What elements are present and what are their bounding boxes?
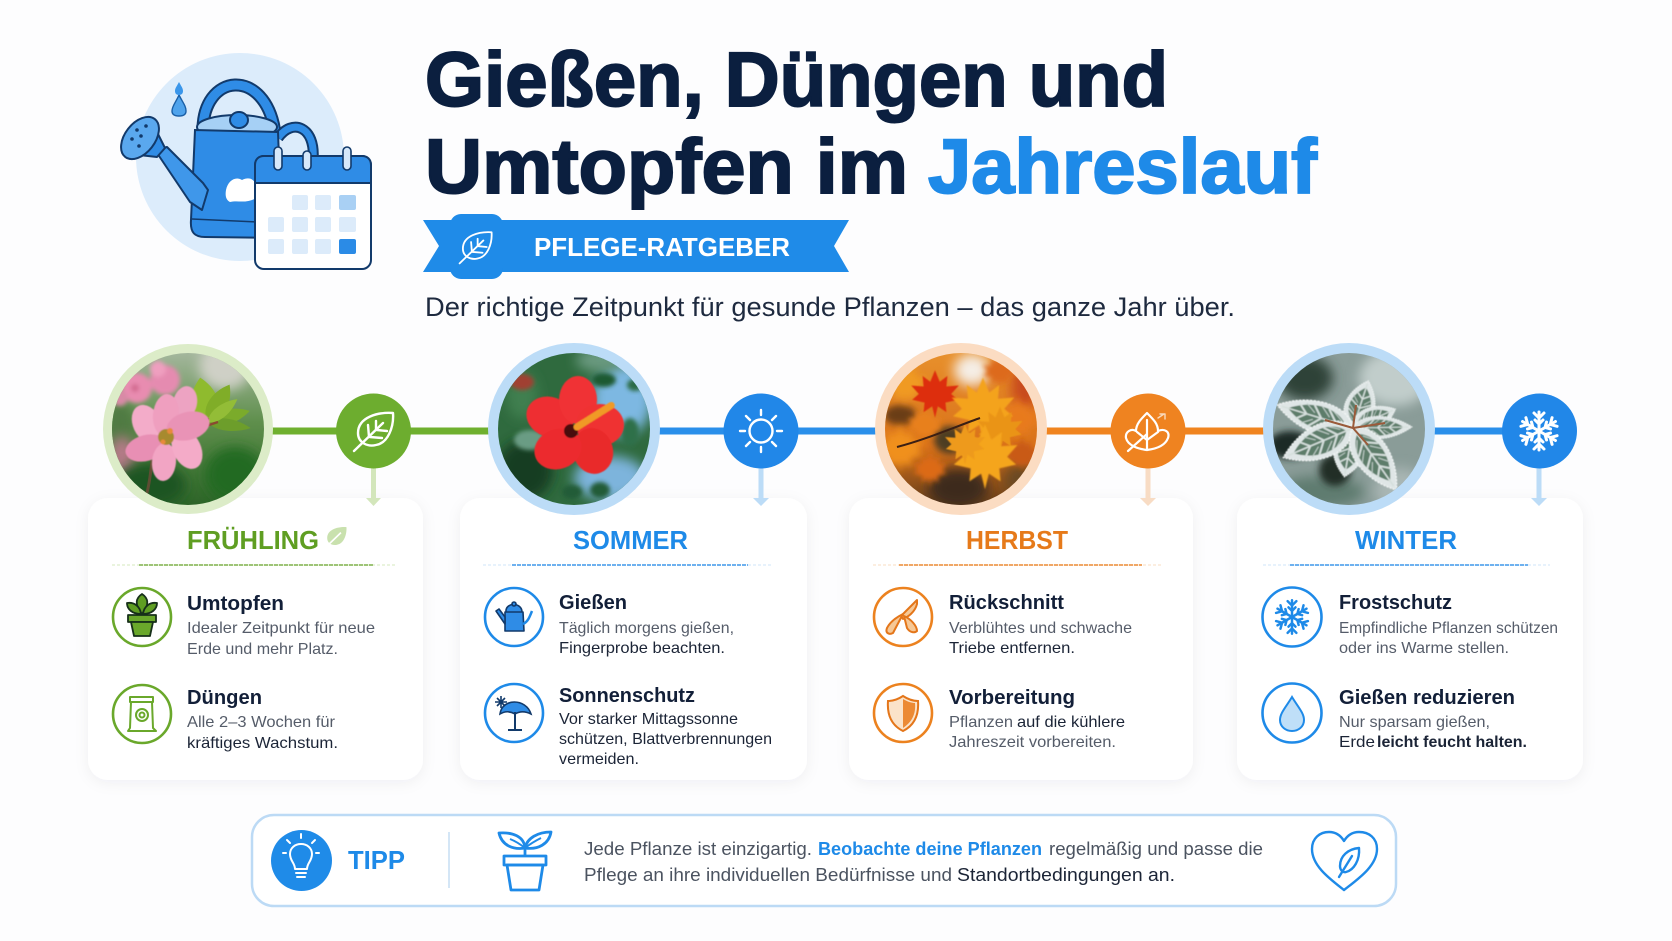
panel: Herbst card: Vorbereitung [949, 686, 1075, 709]
panel: Winter card: Nur sparsam gießen, [1339, 714, 1490, 731]
tip text: Jede Pflanze ist einzigartig. [584, 839, 812, 859]
illustration: watering can and calendar [113, 53, 371, 269]
tip text: Pflege an ihre individuellen Bedürfnisse und [584, 865, 952, 885]
panel: Herbst card [849, 498, 1193, 780]
photo: frosted winter leaves [1263, 343, 1435, 515]
icon: ribbon leaf [460, 232, 492, 263]
icon: autumn leaf badge [1110, 394, 1186, 468]
icon: plant pot [499, 832, 551, 890]
item: Gießen [485, 588, 543, 646]
panel: Winter card: oder ins Warme stellen. [1339, 640, 1509, 657]
panel: Winter card [1237, 498, 1583, 780]
tip text: regelmäßig und passe die [1049, 839, 1263, 859]
title: Jahreslauf [928, 124, 1317, 210]
ribbon: Pflege-Ratgeber [423, 214, 849, 279]
photo: summer hibiscus [488, 343, 660, 515]
panel: Herbst card: Verblühtes und schwache [949, 620, 1132, 637]
panel: Frühling card [88, 498, 423, 780]
arrow: Sommer connector [753, 466, 769, 506]
panel: Sommer card: Sonnenschutz [559, 684, 695, 707]
panel: Sommer card: Vor starker Mittagssonne [559, 711, 738, 728]
panel: Frühling card: Idealer Zeitpunkt für neue [187, 620, 375, 637]
icon: spring leaf badge [336, 394, 411, 468]
panel: Sommer card: vermeiden. [559, 751, 639, 768]
tip text [584, 839, 1263, 885]
panel: Frühling card: kräftiges Wachstum. [187, 735, 338, 752]
panel: Frühling card: Düngen [187, 686, 262, 709]
icon: heart with leaf [1312, 832, 1377, 890]
panel: Frühling card: Umtopfen [187, 592, 284, 615]
panel: Sommer card: schützen, Blattverbrennungen [559, 731, 772, 748]
panel: Sommer card [460, 498, 807, 780]
photo: spring blossom [103, 342, 273, 514]
icon: light bulb [271, 830, 332, 891]
panel: Sommer card: Täglich morgens gießen, [559, 620, 734, 637]
title: Umtopfen im [425, 124, 908, 210]
item: Düngen [113, 685, 171, 743]
arrow: Frühling connector [366, 466, 381, 506]
panel: Winter card: Erde [1339, 734, 1375, 751]
item: Gießen reduzieren [1262, 684, 1322, 742]
heading: Frühling: FRÜHLING [187, 525, 319, 555]
item: Vorbereitung [874, 684, 932, 742]
icon: heading leaf [325, 527, 347, 548]
photo: autumn leaves [875, 343, 1047, 515]
panel: Winter card: Gießen reduzieren [1339, 686, 1515, 709]
heading: Herbst: HERBST [966, 525, 1068, 555]
panel: Herbst card: auf die kühlere [1017, 714, 1125, 731]
label: Tipp: TIPP [348, 845, 405, 875]
icon: winter snowflake badge [1502, 394, 1577, 468]
arrow: Herbst connector [1140, 466, 1156, 506]
tip text: Beobachte deine Pflanzen [818, 839, 1042, 859]
icon: summer sun badge [724, 394, 798, 468]
heading: Winter: WINTER [1355, 525, 1457, 555]
panel: Herbst card: Pflanzen [949, 714, 1013, 731]
panel: Winter card: leicht feucht halten. [1377, 734, 1527, 751]
item: Sonnenschutz [485, 684, 543, 742]
title [425, 37, 1317, 210]
timeline line [265, 428, 1510, 434]
panel: Winter card: Frostschutz [1339, 591, 1452, 614]
title: Gießen, Düngen und [425, 37, 1168, 123]
tip text: Standortbedingungen an. [957, 865, 1175, 885]
panel: Frühling card: Alle 2–3 Wochen für [187, 714, 336, 731]
panel: Sommer card: Fingerprobe beachten. [559, 640, 725, 657]
arrow: Winter connector [1531, 466, 1547, 506]
panel: Herbst card: Jahreszeit vorbereiten. [949, 734, 1116, 751]
heading: Sommer: SOMMER [573, 525, 688, 555]
item: Umtopfen [113, 588, 171, 646]
panel: Tipp callout [252, 815, 1396, 906]
item: Rückschnitt [874, 588, 932, 646]
ribbon: Pflege-Ratgeber: PFLEGE-RATGEBER [534, 232, 790, 262]
item: Frostschutz [1262, 588, 1322, 646]
panel: Herbst card: Triebe entfernen. [949, 640, 1075, 657]
panel: Sommer card: Gießen [559, 591, 627, 614]
panel: Herbst card: Rückschnitt [949, 591, 1064, 614]
panel: Winter card: Empfindliche Pflanzen schützen [1339, 620, 1558, 637]
subtitle: Der richtige Zeitpunkt für gesunde Pflanzen – das ganze Jahr über. [425, 292, 1235, 322]
panel: Frühling card: Erde und mehr Platz. [187, 641, 338, 658]
